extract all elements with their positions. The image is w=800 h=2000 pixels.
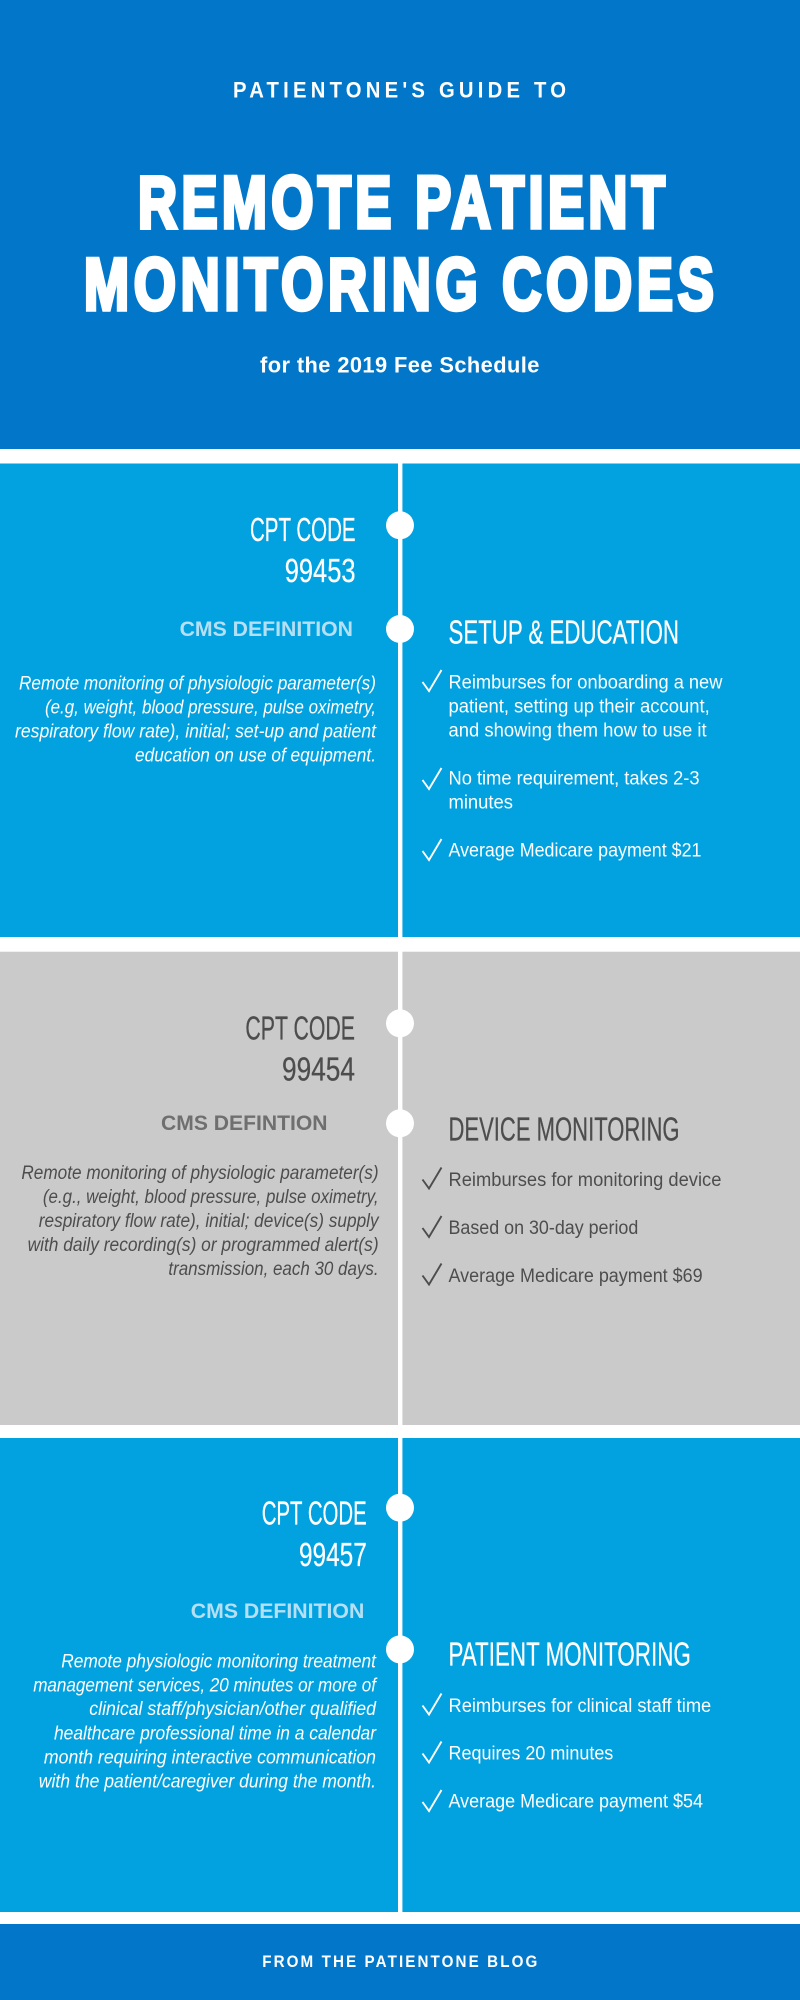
definition text: transmission, each 30 days. bbox=[168, 1259, 379, 1280]
definition text: with the patient/caregiver during the month. bbox=[39, 1771, 376, 1792]
code heading: CPT CODE bbox=[250, 511, 356, 548]
code heading: 99454 bbox=[282, 1051, 355, 1088]
definition text: Remote monitoring of physiologic parameter(s) bbox=[19, 674, 376, 695]
code heading bbox=[262, 1495, 367, 1573]
definition text: (e.g, weight, blood pressure, pulse oximetry, bbox=[45, 697, 376, 718]
main title: MONITORING CODES bbox=[84, 244, 714, 326]
section heading: SETUP & EDUCATION bbox=[448, 614, 679, 651]
bullet list: patient, setting up their account, bbox=[448, 696, 710, 717]
definition text: month requiring interactive communication bbox=[44, 1747, 376, 1768]
main title: REMOTE PATIENT bbox=[138, 162, 665, 244]
definition text: Remote physiologic monitoring treatment bbox=[61, 1652, 377, 1672]
definition text: (e.g., weight, blood pressure, pulse oximetry, bbox=[43, 1187, 379, 1208]
code heading bbox=[245, 1009, 355, 1088]
definition text bbox=[33, 1652, 378, 1792]
icon: check marks bbox=[422, 1694, 442, 1811]
eyebrow heading: PATIENTONE'S GUIDE TO bbox=[233, 78, 566, 103]
panel: CPT 99453 bbox=[0, 464, 800, 937]
section heading: DEVICE MONITORING bbox=[448, 1110, 680, 1147]
definition text: respiratory flow rate), initial; set-up and patient bbox=[15, 721, 377, 742]
bullet list bbox=[448, 1696, 711, 1813]
bullet list: Reimburses for onboarding a new bbox=[448, 672, 723, 693]
bullet list bbox=[448, 1170, 721, 1287]
bullet list bbox=[448, 672, 723, 861]
bullet list: Requires 20 minutes bbox=[448, 1744, 613, 1765]
header banner bbox=[0, 0, 800, 449]
footer text: FROM THE PATIENTONE BLOG bbox=[262, 1954, 537, 1971]
bullet list: Average Medicare payment $21 bbox=[448, 840, 702, 861]
code heading: 99457 bbox=[299, 1536, 367, 1573]
subtitle: for the 2019 Fee Schedule bbox=[260, 352, 539, 378]
bullet list: No time requirement, takes 2-3 bbox=[448, 768, 700, 789]
CMS definition label: CMS DEFINTION bbox=[161, 1111, 328, 1135]
icon: check marks bbox=[422, 1168, 442, 1284]
code heading: CPT CODE bbox=[262, 1495, 367, 1532]
timeline line and nodes bbox=[386, 463, 414, 1912]
definition text bbox=[21, 1163, 380, 1280]
section heading: PATIENT MONITORING bbox=[448, 1636, 691, 1673]
definition text: respiratory flow rate), initial; device(s) supply bbox=[39, 1211, 380, 1232]
panel: CPT 99457 bbox=[0, 1438, 800, 1912]
bullet list: Reimburses for monitoring device bbox=[448, 1170, 721, 1191]
definition text: management services, 20 minutes or more of bbox=[33, 1676, 378, 1696]
main title bbox=[84, 162, 714, 326]
code heading: 99453 bbox=[285, 552, 356, 589]
bullet list: Reimburses for clinical staff time bbox=[448, 1696, 711, 1717]
definition text: clinical staff/physician/other qualified bbox=[89, 1699, 377, 1720]
footer banner bbox=[0, 1924, 800, 2000]
definition text: Remote monitoring of physiologic parameter(s) bbox=[21, 1163, 379, 1184]
CMS definition label: CMS DEFINITION bbox=[180, 617, 353, 641]
bullet list: minutes bbox=[448, 792, 513, 813]
code heading: CPT CODE bbox=[245, 1009, 355, 1046]
bullet list: and showing them how to use it bbox=[448, 721, 707, 742]
definition text: healthcare professional time in a calendar bbox=[54, 1723, 377, 1744]
definition text bbox=[15, 674, 377, 766]
bullet list: Based on 30-day period bbox=[448, 1218, 638, 1239]
definition text: education on use of equipment. bbox=[135, 745, 376, 766]
code heading bbox=[250, 511, 356, 589]
bullet list: Average Medicare payment $69 bbox=[448, 1266, 703, 1287]
CMS definition label: CMS DEFINITION bbox=[191, 1599, 364, 1623]
bullet list: Average Medicare payment $54 bbox=[448, 1792, 703, 1813]
icon: check marks bbox=[422, 670, 442, 860]
definition text: with daily recording(s) or programmed alert(s) bbox=[28, 1235, 379, 1256]
panel: CPT 99454 bbox=[0, 952, 800, 1425]
